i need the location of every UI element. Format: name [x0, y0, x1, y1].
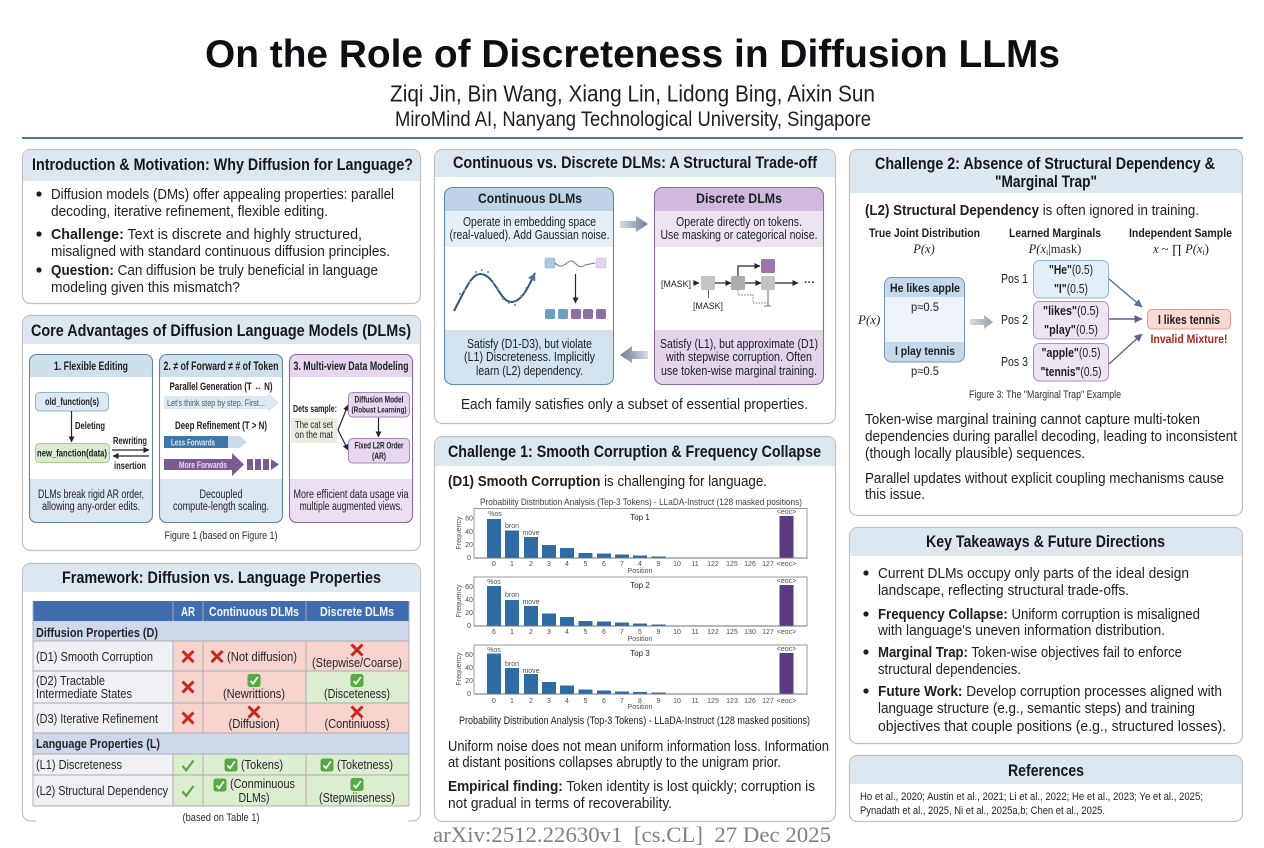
chart: top 3: <eoc> [777, 698, 796, 705]
arrow: parallel generation [164, 393, 279, 412]
chart: top 3: bron [505, 661, 519, 668]
box: position 1 marginals: "He"(0.5) [1049, 263, 1093, 277]
column headers: x ~ ∏ P(x [1153, 242, 1202, 256]
table header: Discrete DLMs [320, 605, 394, 619]
text: subset caption: Each family satisfies only a subset of essential properties. [461, 396, 808, 413]
label: deep refinement: Deep Refinement (T > N) [175, 420, 267, 432]
chart: top 2: Top 2 [630, 581, 650, 590]
bar: less forwards: Less Forwards [171, 438, 215, 448]
caption: figure 2: Probability Distribution Analysis (Top-3 Tokens) - LLaDA-Instruct (128 masked positions) [459, 715, 810, 727]
chart: top 2: 20 [465, 610, 473, 617]
box: joint distribution [884, 278, 964, 362]
text block: introduction bullets: misaligned with standard continuous diffusion principles. [51, 243, 390, 260]
column headers: i [1202, 248, 1205, 257]
text: L2 statement: (L2) Structural Dependency is often ignored in training. [865, 202, 1199, 219]
table header: AR [181, 605, 195, 619]
card: discrete DLMs: Operate directly on tokens. [676, 215, 802, 229]
box: position 1 marginals: "I"(0.5) [1054, 282, 1088, 296]
caption: table: (based on Table 1) [182, 812, 260, 824]
text block: introduction bullets: modeling given this mismatch? [51, 279, 240, 296]
chart: top 3: 40 [465, 665, 473, 672]
panel: continuous vs discrete [434, 150, 836, 424]
arrow: continuous to discrete [620, 216, 648, 232]
caption: flexible editing [38, 489, 144, 513]
table header: Continuous DLMs [209, 605, 299, 619]
box: joint distribution: He likes apple [890, 281, 960, 295]
chart: top 1: Position [628, 568, 653, 575]
row: D1 [36, 644, 402, 670]
chart: top 1: move [522, 530, 540, 537]
text block: takeaways bullets: Frequency Collapse: Uniform corruption is misaligned [878, 606, 1200, 623]
box: position 2 marginals [1034, 302, 1108, 339]
chart: top 2: 0 [467, 623, 471, 630]
panel: references [850, 756, 1242, 822]
card: flexible editing [30, 354, 152, 522]
section: diffusion properties: Diffusion Properties (D) [36, 626, 158, 640]
text block: marginal training [865, 411, 1238, 462]
card: continuous DLMs: (L1) Discreteness. Implicitly [464, 350, 596, 364]
chart: top 3: 125 [707, 698, 719, 705]
chart: top 3: Frequency [456, 652, 463, 686]
chart: top 3: 9 [657, 698, 661, 705]
row: L2 [36, 777, 395, 805]
chart: top 3: %os [487, 647, 501, 654]
panel: key takeaways [850, 528, 1242, 744]
text block: introduction bullets: Question: Can diffusion be truly beneficial in language [51, 262, 378, 279]
sample text box [291, 404, 337, 443]
position labels: Pos 2 [1001, 312, 1028, 327]
row: D1: (Not diffusion) [227, 650, 297, 664]
chart: top 2: 127 [762, 629, 774, 636]
diagram: mask token flow: [MASK] [693, 301, 723, 312]
chart: top 1: 9 [657, 561, 661, 568]
arXiv stamp: arXiv:2512.22630v1 [cs.CL] 27 Dec 2025 [433, 822, 831, 847]
heading: challenge 2 [875, 154, 1215, 191]
box: invalid sample: I likes tennis [1158, 313, 1220, 327]
chart: top 1: 4 [565, 561, 569, 568]
chart: top 3: 6 [602, 698, 606, 705]
heading: introduction: Introduction & Motivation: Why Diffusion for Language? [32, 155, 413, 174]
arrow: discrete to continuous [620, 346, 648, 363]
chart: top 3: 3 [547, 698, 551, 705]
caption: figure 1: Figure 1 (based on Figure 1) [164, 530, 278, 542]
text block: uniform noise: at distant positions collapses abruptly to the unigram prior. [448, 754, 781, 771]
arrows: rewriting and insertion: insertion [114, 460, 146, 472]
box: old function: old_function(s) [45, 396, 99, 408]
box: fixed order [348, 438, 410, 463]
chart: top 2: %os [487, 579, 501, 586]
chart: top 1: <eoc> [777, 561, 796, 568]
row: D2: (D2) Tractable [36, 674, 105, 688]
chart: top 1: <eoc> [777, 509, 796, 516]
chart: top 3: 0 [492, 698, 496, 705]
position labels: Pos 1 [1001, 271, 1028, 286]
section: language properties: Language Properties (L) [36, 737, 160, 751]
chart: top 1: 60 [465, 516, 473, 522]
chart: top 1: 0 [492, 561, 496, 568]
box: old function [36, 392, 108, 411]
column headers: ) [1205, 242, 1209, 256]
arrows: sample to models [338, 405, 378, 450]
chart: top 1: 5 [584, 561, 588, 568]
text: D1 statement: (D1) Smooth Corruption is challenging for language. [448, 473, 767, 490]
chart: top 1: 127 [762, 561, 774, 568]
row: L1: (Tokens) [241, 758, 283, 772]
caption: data usage [294, 489, 409, 513]
chart: top 3: 10 [673, 698, 681, 705]
card: continuous DLMs: Operate in embedding space [463, 215, 596, 229]
text block: uniform noise [448, 738, 829, 771]
heading: challenge 2: "Marginal Trap" [995, 172, 1097, 191]
box: position 3 marginals: "tennis"(0.5) [1040, 365, 1102, 379]
box: diffusion model: Diffusion Model [354, 394, 404, 404]
heading: key takeaways: Key Takeaways & Future Directions [926, 532, 1165, 551]
box: diffusion model: (Robust Learning) [352, 404, 407, 414]
panel: framework table [22, 564, 420, 826]
box: fixed order: (AR) [372, 451, 386, 461]
card: forward vs token [160, 354, 282, 522]
panel: introduction and motivation [22, 150, 420, 304]
box: position 3 marginals: "apple"(0.5) [1042, 346, 1100, 360]
text block: introduction bullets: Diffusion models (DMs) offer appealing properties: parallel [51, 186, 394, 203]
text block: marginal training: Token-wise marginal training cannot capture multi-token [865, 411, 1200, 428]
title: On the Role of Discreteness in Diffusion LLMs [205, 33, 1060, 76]
chart: top 1: 40 [465, 529, 473, 536]
text block: takeaways bullets: with language's uneven information distribution. [877, 622, 1165, 639]
chart: top 3 [456, 645, 807, 711]
text block: takeaways bullets: language structure (e.g., semantic steps) and training [878, 700, 1195, 717]
row: D1: (Stepwise/Coarse) [312, 656, 402, 670]
chart: top 3: 2 [529, 698, 533, 705]
chart: top 1: Frequency [456, 516, 463, 550]
chart: top 3: 123 [726, 698, 738, 705]
column headers: P(x [1028, 242, 1046, 256]
row: L2: (Stepwiiseness) [319, 791, 395, 805]
position labels [1001, 271, 1028, 369]
bar: less forwards [164, 436, 247, 448]
chart: top 1: 1 [510, 561, 514, 568]
label: P(x): P(x) [857, 312, 880, 327]
arrow: more forwards: More Forwards [179, 460, 227, 470]
text block: takeaways bullets: Future Work: Develop corruption processes aligned with [878, 683, 1222, 700]
heading: framework: Framework: Diffusion vs. Language Properties [62, 568, 381, 587]
arrows: rewriting and insertion [112, 435, 149, 472]
text block: empirical finding [448, 778, 815, 812]
row: D3: (Diffusion) [228, 717, 280, 731]
caption: flexible editing: DLMs break rigid AR order, [38, 489, 144, 501]
chart: top 2: <eoc> [777, 629, 796, 636]
card: continuous DLMs [444, 188, 614, 384]
row: D2: Intermediate States [36, 687, 132, 701]
chart: top 1: 126 [744, 561, 756, 568]
box: fixed order: Fixed L2R Order [354, 440, 404, 450]
table: properties comparison [33, 601, 409, 806]
diagram: mask token flow [661, 259, 815, 312]
text block: parallel updates: Parallel updates without explicit coupling mechanisms cause [865, 470, 1224, 487]
text block: takeaways bullets: Marginal Trap: Token-wise objectives fail to enforce [878, 644, 1182, 661]
row: L2: DLMs) [238, 791, 270, 805]
column headers [869, 226, 1232, 257]
chart: top 2: 1 [510, 629, 514, 636]
chart: top 2 [456, 577, 807, 643]
card: continuous DLMs: Satisfy (D1-D3), but violate [467, 337, 592, 351]
chart: top 1: 0 [467, 555, 471, 562]
chart: top 2: bron [505, 592, 519, 599]
chart: top 3: Position [628, 704, 653, 711]
heading: references: References [1008, 761, 1084, 780]
box: position 2 marginals: "likes"(0.5) [1043, 304, 1099, 318]
chart: top 1: %os [488, 511, 502, 518]
card: multi-view data modeling [290, 354, 412, 522]
card: continuous DLMs: learn (L2) dependency. [476, 364, 583, 378]
chart: noisy curve [454, 269, 535, 311]
chart: top 2: 125 [726, 629, 738, 636]
chart: top 3: 11 [691, 698, 699, 705]
chart: top 1: 11 [691, 561, 699, 568]
chart: top 2: 4 [565, 629, 569, 636]
chart: top 2: 5 [638, 629, 642, 636]
caption: compute scaling: Decoupled [200, 489, 242, 501]
diagram: embedding tokens [545, 258, 606, 319]
chart: top 3: 8 [638, 698, 642, 705]
chart: top 2: 6 [602, 629, 606, 636]
text block: uniform noise: Uniform noise does not mean uniform information loss. Information [448, 738, 829, 755]
chart: top 1: 10 [673, 561, 681, 568]
chart: top 2: 122 [707, 629, 719, 636]
chart: top 1: bron [505, 523, 519, 530]
chart: top 1: Top 1 [630, 513, 650, 522]
diagram: mask token flow: ··· [804, 277, 815, 289]
table header [181, 605, 394, 619]
card: continuous DLMs: Continuous DLMs [478, 191, 582, 206]
arrow: more forwards [164, 453, 279, 476]
box: diffusion model [348, 392, 410, 417]
chart: top 3: 5 [584, 698, 588, 705]
box: position 2 marginals: "play"(0.5) [1044, 323, 1098, 337]
text block: introduction bullets: decoding, iterative refinement, flexible editing. [51, 203, 328, 220]
column headers: Independent Sample [1129, 226, 1232, 240]
arrow: joint to marginals [970, 315, 993, 329]
sample text box: Dets sample: [293, 404, 337, 415]
chart: top 3: <eoc> [777, 646, 796, 653]
chart: top 1: 125 [726, 561, 738, 568]
affiliations: MiroMind AI, Nanyang Technological University, Singapore [395, 108, 871, 131]
chart: top 2: 7 [620, 629, 624, 636]
row: D2 [36, 674, 390, 701]
row: D2: (Disceteness) [324, 687, 390, 701]
chart: top 2: Position [628, 636, 653, 643]
chart: top 3: 20 [465, 678, 473, 685]
text block: takeaways bullets: landscape, reflecting structural trade-offs. [878, 582, 1129, 599]
chart: top 2: 60 [465, 584, 473, 591]
chart: top 3: 7 [620, 698, 624, 705]
caption: flexible editing: allowing any-order edits. [42, 501, 140, 513]
text block: citations [860, 791, 1203, 817]
arrow: deleting: Deleting [75, 420, 105, 432]
chart title: Probability Distribution Analysis (Tep-3 Tokens) - LLaDA-Instruct (128 masked positions) [480, 497, 802, 508]
chart: top 2: 2 [529, 629, 533, 636]
chart: top 2: 9 [657, 629, 661, 636]
arrow: parallel generation: Let's think step by step. First... [167, 398, 265, 408]
text block: citations: Ho et al., 2020; Austin et al., 2021; Li et al., 2022; He et al., 2023; Ye et al., 2025; [860, 791, 1203, 803]
text block: empirical finding: Empirical finding: Token identity is lost quickly; corruption is [448, 778, 815, 795]
card: discrete DLMs [654, 188, 824, 384]
column headers: True Joint Distribution [869, 226, 980, 240]
text block: introduction bullets [36, 186, 394, 296]
arrow: deleting [72, 411, 105, 442]
chart: top 1: 122 [707, 561, 719, 568]
card: continuous DLMs: (real-valued). Add Gaussian noise. [450, 228, 610, 242]
chart: top 2: 11 [691, 629, 699, 636]
chart: top 1: 4 [638, 561, 642, 568]
sample text box: The cat set [295, 420, 333, 431]
row: L2: (L2) Structural Dependency [36, 784, 169, 798]
chart: top 2: 130 [744, 629, 756, 636]
text block: takeaways bullets: objectives that couple positions (e.g., structured losses). [878, 718, 1226, 735]
box: position 3 marginals [1034, 344, 1108, 381]
text block: takeaways bullets: structural dependencies. [878, 661, 1021, 678]
row: D3 [36, 706, 390, 731]
column headers: i [1046, 248, 1049, 257]
text block: citations: Pynadath et al., 2025, Ni et al., 2025a,b; Chen et al., 2025. [860, 805, 1105, 817]
box: new function [36, 444, 110, 462]
heading: trade-off: Continuous vs. Discrete DLMs: A Structural Trade-off [453, 153, 817, 172]
row: D3: (Continiuoss) [324, 717, 390, 731]
chart: top 2: Frequency [456, 584, 463, 618]
row: D2: (Newrittions) [223, 687, 285, 701]
chart: top 2: 10 [673, 629, 681, 636]
chart: top 1: 3 [547, 561, 551, 568]
arrows: marginals to sample [1109, 279, 1142, 364]
panel: core advantages [22, 316, 420, 550]
box: new function: new_fanction(data) [37, 448, 107, 460]
row: L2: (Conminuous [230, 777, 295, 791]
chart: top 2: move [522, 599, 540, 606]
row: D1: (D1) Smooth Corruption [36, 650, 153, 664]
text block: parallel updates [865, 470, 1224, 503]
chart: top 2: 5 [584, 629, 588, 636]
card: forward vs token: 2. ≠ of Forward ≠ # of Token [164, 359, 278, 373]
caption: compute scaling: compute-length scaling. [173, 501, 269, 513]
position labels: Pos 3 [1001, 354, 1028, 369]
chart: top 1: 2 [529, 561, 533, 568]
chart: top 3: Top 3 [630, 649, 650, 658]
text block: marginal training: (though locally plausible) sequences. [865, 445, 1085, 462]
chart: top 3: 60 [465, 652, 473, 659]
card: discrete DLMs: Satisfy (L1), but approximate (D1) [660, 337, 818, 351]
chart: top 2: 40 [465, 597, 473, 604]
chart: top 3: 126 [744, 698, 756, 705]
box: invalid sample [1148, 310, 1230, 346]
row: D3: (D3) Iterative Refinement [36, 712, 158, 726]
card: discrete DLMs: Use masking or categorical noise. [660, 228, 818, 242]
chart: top 2: <eoc> [777, 578, 796, 585]
row: L1: (Toketness) [337, 758, 393, 772]
text block: introduction bullets: Challenge: Text is discrete and highly structured, [51, 226, 362, 243]
caption: figure 3: Figure 3: The "Marginal Trap" Example [969, 389, 1121, 401]
heading: challenge 1: Challenge 1: Smooth Corruption & Frequency Collapse [448, 442, 821, 461]
chart: top 2: 6 [492, 629, 496, 636]
column headers: P(x) [912, 242, 935, 256]
card: flexible editing: 1. Flexible Editing [54, 359, 128, 373]
figure: marginal trap [857, 226, 1232, 401]
chart: top 1 [456, 508, 807, 575]
row: L1: (L1) Discreteness [36, 758, 122, 772]
label: second probability: p≈0.5 [911, 364, 939, 378]
card: discrete DLMs: with stepwise corruption. Often [665, 350, 812, 364]
chart: top 3: move [522, 668, 540, 675]
panel: challenge 1 [434, 436, 836, 822]
card: discrete DLMs: Discrete DLMs [696, 191, 782, 206]
column headers: Learned Marginals [1009, 226, 1101, 240]
chart: top 3: 127 [762, 698, 774, 705]
text block: takeaways bullets [863, 565, 1226, 735]
caption: compute scaling [173, 489, 269, 513]
authors: Ziqi Jin, Bin Wang, Xiang Lin, Lidong Bing, Aixin Sun [390, 80, 875, 106]
caption: data usage: More efficient data usage via [294, 489, 409, 501]
column headers: |mask) [1048, 242, 1081, 256]
text block: empirical finding: not gradual in terms of recoverability. [448, 795, 672, 812]
row: L1 [36, 758, 393, 772]
diagram: mask token flow: [MASK] [661, 279, 691, 290]
chart: top 1: 20 [465, 542, 473, 549]
chart: top 3: 4 [565, 698, 569, 705]
chart: top 2: 3 [547, 629, 551, 636]
box: joint distribution: p≈0.5 [911, 300, 939, 314]
arrows: rewriting and insertion: Rewriting [113, 435, 147, 447]
chart: top 3: 1 [510, 698, 514, 705]
heading: core advantages: Core Advantages of Diffusion Language Models (DLMs) [31, 321, 411, 340]
text block: takeaways bullets: Current DLMs occupy only parts of the ideal design [878, 565, 1189, 582]
chart: top 1: 7 [620, 561, 624, 568]
box: position 1 marginals [1034, 260, 1108, 298]
card: multi-view data modeling: 3. Multi-view Data Modeling [294, 359, 408, 373]
box: joint distribution: I play tennis [895, 344, 955, 358]
box: invalid sample: Invalid Mixture! [1150, 332, 1228, 346]
label: parallel generation: Parallel Generation (T ↔ N) [170, 381, 273, 393]
chart: top 1: 6 [602, 561, 606, 568]
caption: data usage: multiple augmented views. [300, 501, 402, 513]
card: discrete DLMs: use token-wise marginal training. [661, 364, 817, 378]
chart: top 3: 0 [467, 691, 471, 698]
panel: challenge 2 [850, 150, 1242, 516]
text block: parallel updates: this issue. [865, 486, 925, 503]
sample text box: on the mat [295, 430, 333, 441]
